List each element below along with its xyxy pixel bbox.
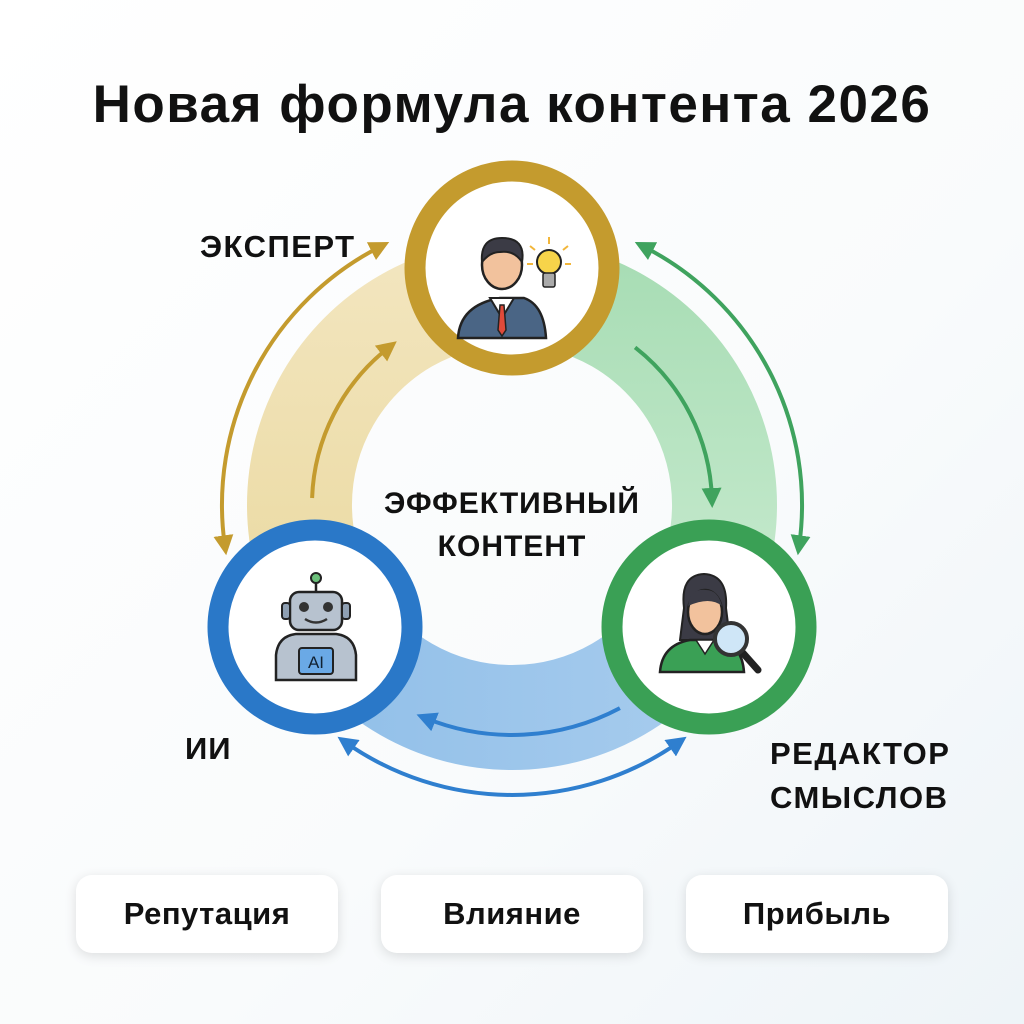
label: editor: РЕДАКТОР [770, 736, 950, 771]
center text: КОНТЕНТ [438, 530, 586, 563]
icon: robot [276, 573, 356, 680]
arrow: gold outer [222, 247, 380, 545]
band: gold [247, 240, 512, 638]
label: expert: ЭКСПЕРТ [200, 229, 356, 264]
pill: reputation: Репутация [124, 896, 290, 931]
arrow: blue outer [346, 742, 678, 795]
pill: reputation [76, 875, 338, 953]
circle: expert [415, 171, 609, 365]
icon: businessman [458, 237, 571, 338]
label: editor [770, 736, 950, 815]
arrow: green outer [644, 247, 802, 545]
arrow: green inner [635, 347, 712, 498]
arrow: gold inner [312, 347, 389, 498]
arrow: blue inner [426, 708, 620, 735]
circle: AI [218, 530, 412, 724]
band: green [512, 240, 777, 638]
pill: influence: Влияние [443, 896, 581, 931]
label: editor: СМЫСЛОВ [770, 780, 949, 815]
icon: robot: AI [308, 653, 324, 672]
pill: profit: Прибыль [743, 896, 891, 931]
icon: woman with magnifier [660, 574, 758, 672]
label: AI: ИИ [185, 731, 232, 766]
pill: influence [381, 875, 643, 953]
band: blue [282, 585, 742, 770]
center text: ЭФФЕКТИВНЫЙ [384, 487, 640, 520]
pill: profit [686, 875, 948, 953]
title: Новая формула контента 2026 [93, 75, 931, 134]
circle: editor [612, 530, 806, 724]
center text [384, 486, 640, 563]
